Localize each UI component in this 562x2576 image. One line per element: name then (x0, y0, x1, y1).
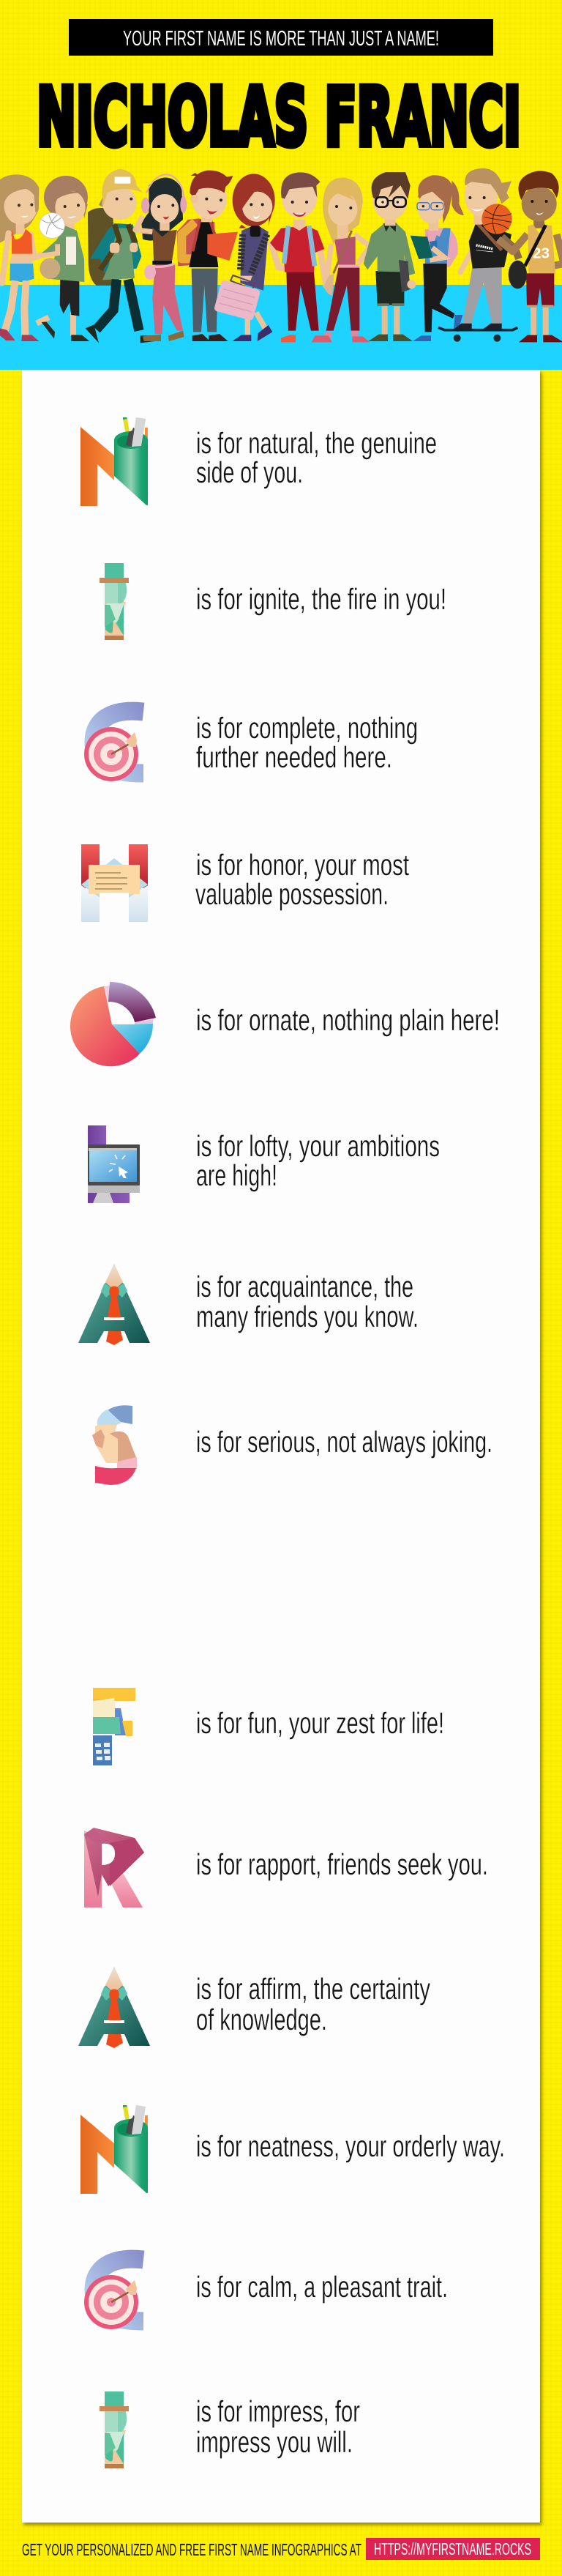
girl with pink bag (214, 174, 275, 341)
icon: C target (84, 2259, 143, 2329)
text: complete (196, 711, 418, 774)
text: impress: is for impress, for (196, 2394, 360, 2428)
boy in yellow tank: 23 (533, 245, 550, 262)
text: acquaintance: is for acquaintance, the (196, 1270, 413, 1303)
right six characters (270, 168, 562, 342)
text: ignite: is for ignite, the fire in you! (196, 582, 446, 616)
row: N neatness (80, 2105, 505, 2194)
boy with cap and backpack (86, 169, 161, 343)
row: I impress (100, 2391, 360, 2468)
text: natural (196, 426, 437, 489)
footer (22, 2538, 540, 2560)
text: acquaintance (196, 1270, 419, 1333)
icon: L monitor (88, 1125, 140, 1203)
icon: R gem (84, 1828, 144, 1907)
text: natural: is for natural, the genuine (196, 426, 437, 460)
icon: N pencil cup (80, 2105, 148, 2194)
icon: N pencil cup (80, 417, 148, 506)
row: H honor (81, 844, 409, 922)
text: fun: is for fun, your zest for life! (196, 1706, 444, 1740)
text: complete: further needed here. (196, 740, 392, 774)
boy with red backpack and book (177, 171, 238, 341)
girl with headphones (135, 174, 187, 341)
girl with volleyball (37, 176, 89, 341)
row: C calm (84, 2259, 448, 2329)
row: A affirm (78, 1967, 430, 2048)
text: complete: is for complete, nothing (196, 711, 418, 745)
text: affirm: of knowledge. (196, 2003, 327, 2036)
blonde girl (312, 178, 370, 342)
row: F fun (93, 1688, 444, 1765)
icon: A tie (78, 1967, 150, 2048)
icon: S handshake (92, 1405, 137, 1485)
text: impress: impress you will. (196, 2425, 353, 2459)
icon: H envelope (81, 844, 148, 922)
boy with glasses (364, 172, 416, 341)
row: R rapport (84, 1828, 488, 1907)
text: lofty: are high! (196, 1158, 277, 1192)
text: honor: valuable possession. (195, 877, 389, 911)
left six characters (0, 169, 275, 343)
icon: A tie (78, 1264, 150, 1345)
text: affirm (196, 1972, 430, 2036)
row: A acquaintance (78, 1264, 419, 1345)
boy in yellow tank (498, 171, 562, 342)
text: honor: is for honor, your most (196, 848, 409, 882)
content panel (22, 370, 540, 2523)
text: calm: is for calm, a pleasant trait. (196, 2270, 448, 2304)
row: O ornate (70, 982, 500, 1066)
row: L lofty (88, 1125, 440, 1203)
text: affirm: is for affirm, the certainty (196, 1972, 430, 2006)
boy in red shirt (270, 172, 332, 342)
text: natural: side of you. (196, 455, 303, 489)
boy on skateboard with basketball (438, 168, 519, 342)
tagline banner (69, 19, 493, 56)
icon: F documents (93, 1688, 135, 1765)
illustration: group of students (0, 168, 562, 343)
icon: I hourglass (100, 2391, 129, 2468)
text: impress (196, 2394, 360, 2459)
girl in orange top (0, 174, 56, 341)
row: I ignite (100, 563, 446, 640)
icon: O pie chart (70, 982, 156, 1066)
text: lofty (196, 1129, 440, 1192)
icon: C target (84, 711, 143, 781)
row: S serious (92, 1405, 492, 1485)
text: acquaintance: many friends you know. (196, 1300, 419, 1333)
text: honor (195, 848, 409, 911)
girl with tablet (411, 175, 464, 341)
row: C complete (84, 711, 418, 781)
row: N natural (80, 417, 437, 506)
text: lofty: is for lofty, your ambitions (196, 1129, 440, 1163)
floor band (0, 285, 562, 370)
icon: I hourglass (100, 563, 129, 640)
